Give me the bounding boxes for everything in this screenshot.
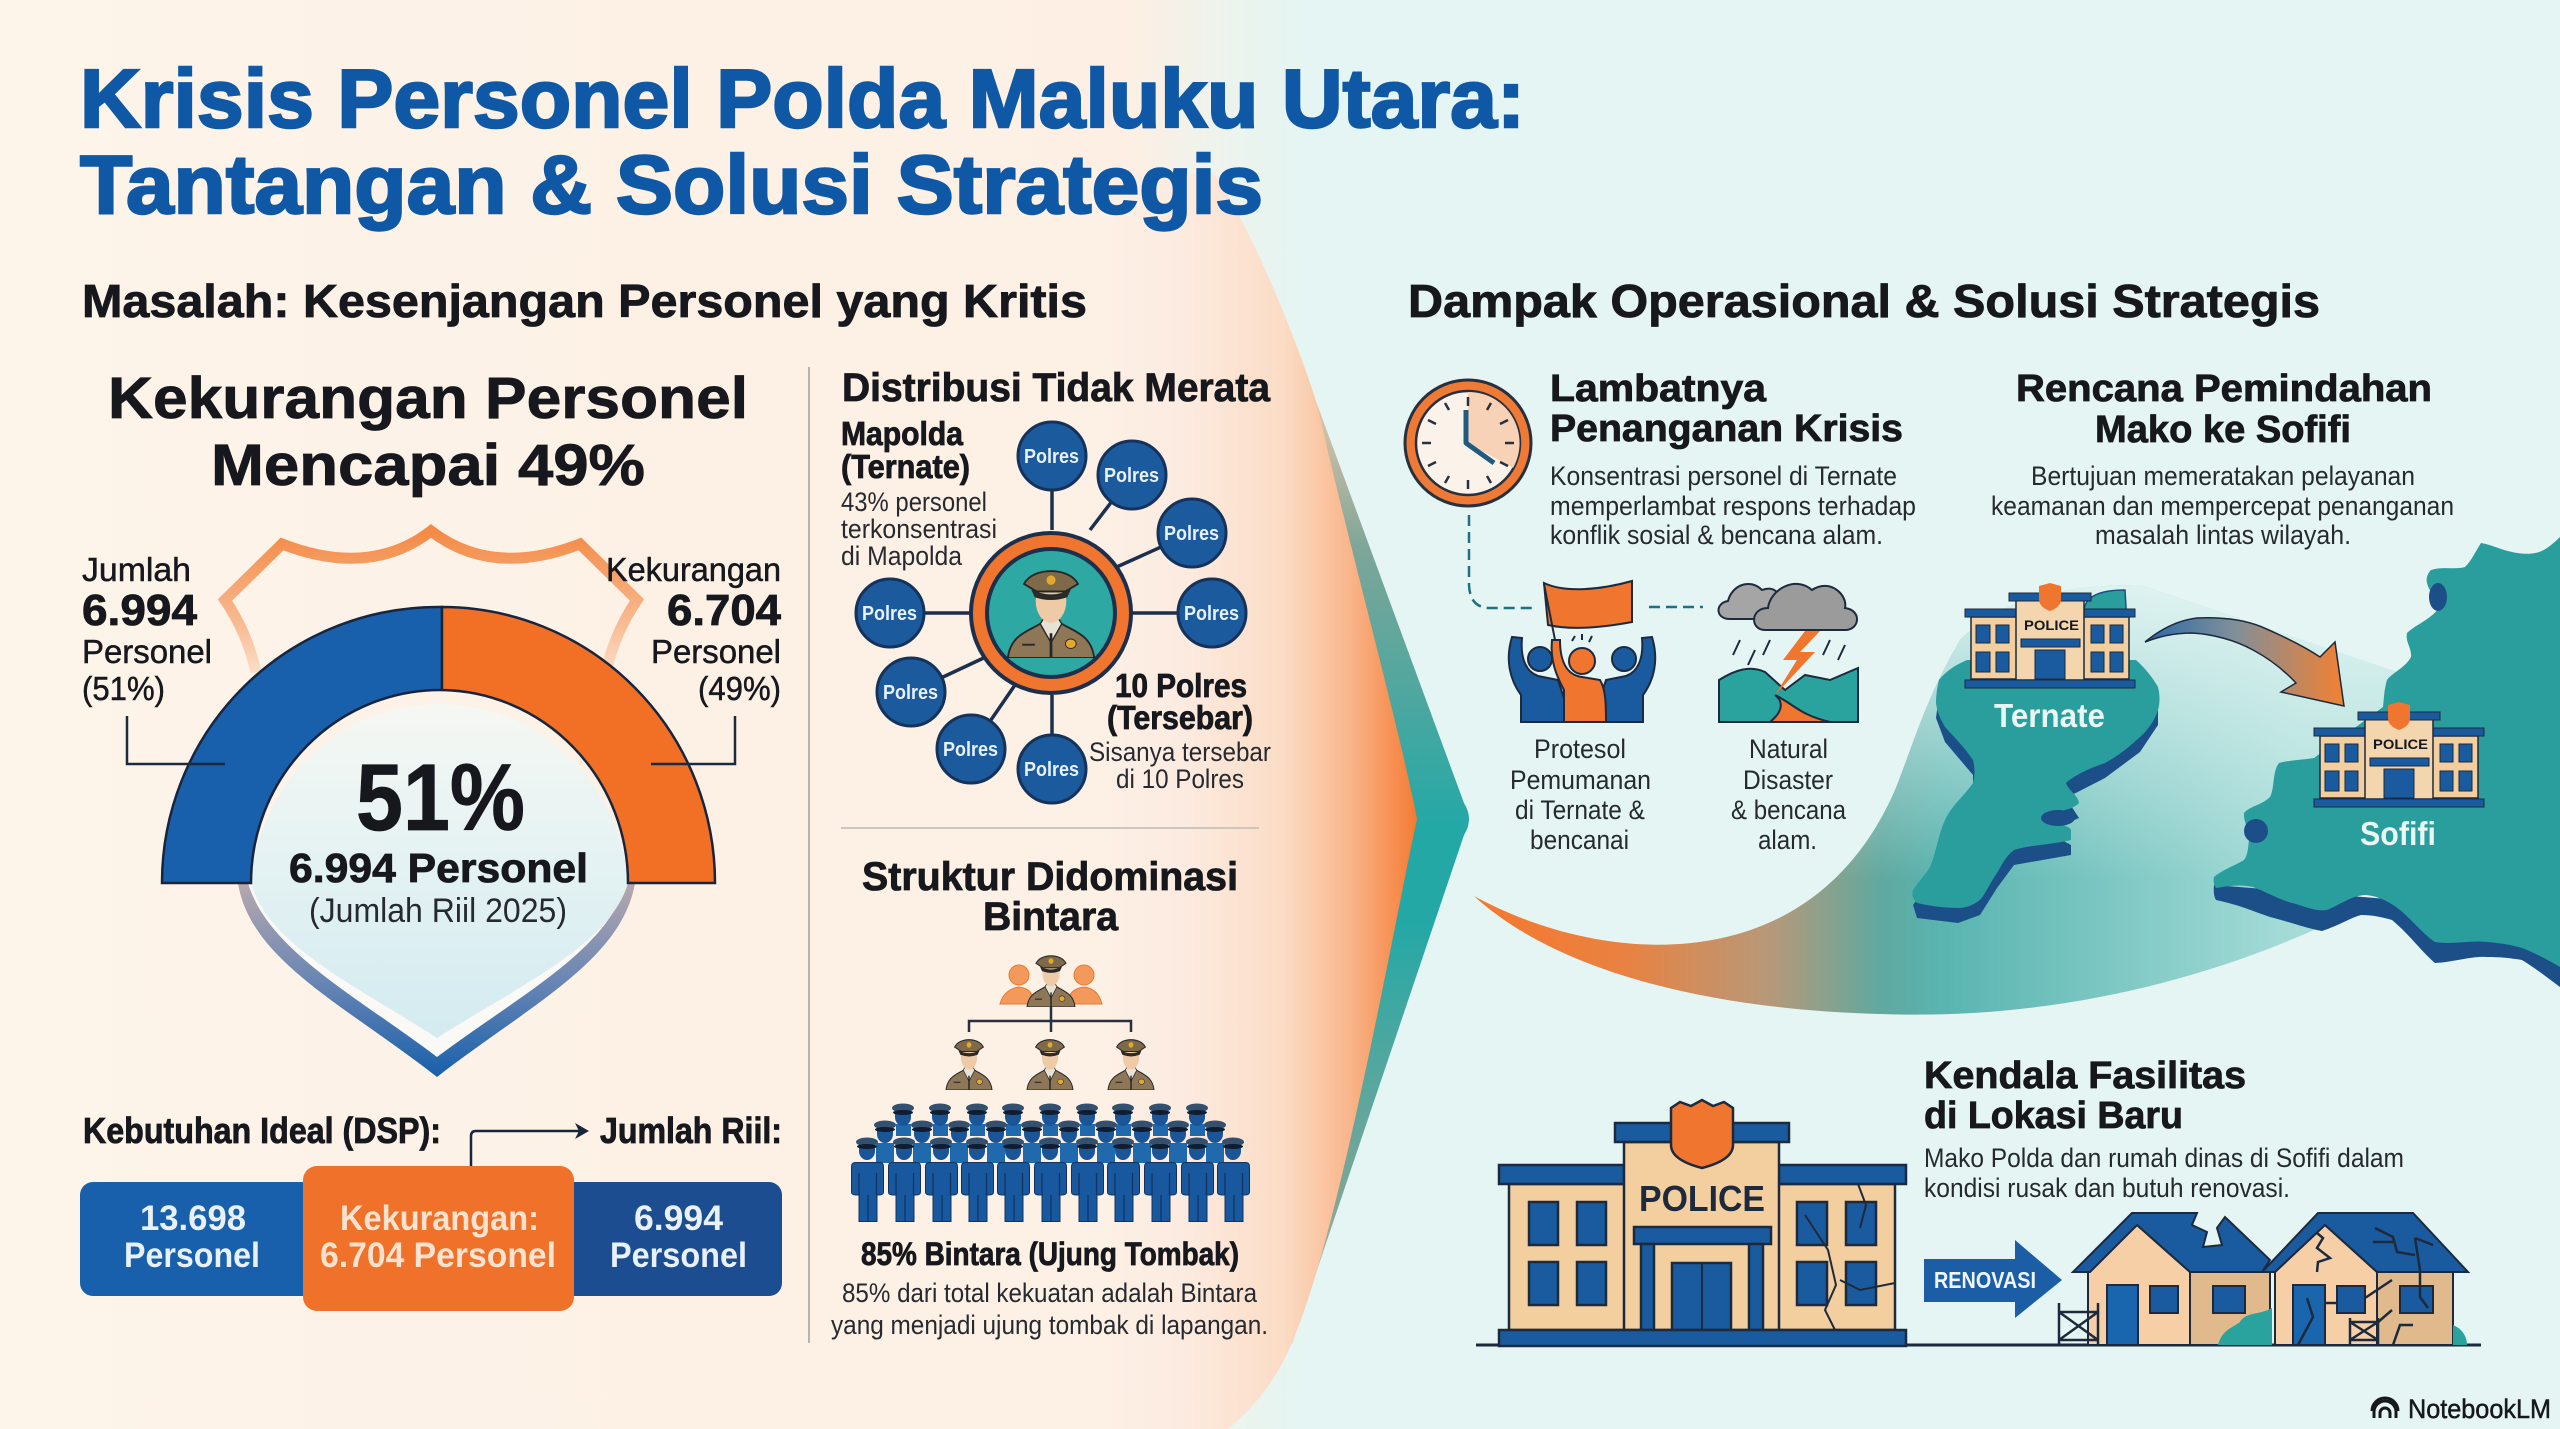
polres labels: Polres [1184, 603, 1239, 625]
text: rencana: Bertujuan memeratakan pelayanan [2031, 461, 2415, 491]
polres labels: Polres [1164, 523, 1219, 545]
label: sofifi: Sofifi [2360, 815, 2436, 852]
caption: protest: Protesol [1534, 734, 1626, 764]
text: mapolda: terkonsentrasi [841, 514, 997, 544]
text: 85% bintara: yang menjadi ujung tombak di lapangan. [831, 1310, 1268, 1340]
polres labels: Polres [1024, 446, 1079, 468]
icon: central officer [971, 533, 1131, 693]
label: jumlah: (51%) [82, 670, 165, 707]
right connector [651, 716, 735, 764]
gauge center value: 6.994 Personel [289, 845, 588, 891]
text: rencana: Mako ke Sofifi [2095, 409, 2351, 451]
text: kendala fasilitas: Kendala Fasilitas [1924, 1055, 2246, 1097]
icon: police headquarters [1499, 1100, 1906, 1346]
text: 10 polres: (Tersebar) [1107, 699, 1253, 736]
left connector [127, 716, 225, 764]
polres labels: Polres [943, 739, 998, 761]
gauge: blue 51% [162, 607, 442, 883]
title: Tantangan & Solusi Strategis [80, 138, 1263, 231]
polres labels: Polres [883, 682, 938, 704]
polres labels: Polres [862, 603, 917, 625]
icon: orange silhouettes [1000, 965, 1102, 1004]
heading: kekurangan personel [108, 366, 748, 498]
text: 10 polres [1089, 667, 1271, 794]
heading: kekurangan personel: Mencapai 49% [211, 433, 645, 498]
title: Krisis Personel Polda Maluku Utara: [80, 52, 1525, 145]
label: kekurangan: Personel [651, 633, 781, 670]
icon: sofifi police building: POLICE [2373, 736, 2428, 752]
panel: distribusi [841, 366, 1271, 803]
dashed connector [1469, 515, 1703, 608]
polres labels: Polres [1024, 759, 1079, 781]
bar: 13.698: 13.698 [140, 1199, 246, 1238]
text: lambatnya: Penanganan Krisis [1550, 408, 1903, 450]
caption: disaster: Natural [1749, 734, 1828, 764]
label: kebutuhan ideal: Kebutuhan Ideal (DSP): [83, 1110, 441, 1151]
text: mapolda: Mapolda [841, 415, 964, 452]
label: jumlah: 6.994 [82, 586, 198, 635]
text: kendala fasilitas: Mako Polda dan rumah dinas di Sofifi dalam [1924, 1143, 2404, 1173]
label: kekurangan: Kekurangan [606, 551, 781, 588]
text: lambatnya: Lambatnya [1550, 368, 1767, 410]
icon: clock [1405, 380, 1531, 506]
label: notebooklm: NotebookLM [2408, 1394, 2551, 1424]
heading: dampak: Dampak Operasional & Solusi Strategis [1408, 275, 2320, 327]
shield inner white [248, 883, 626, 1057]
icon: protest [1509, 581, 1655, 722]
bar: kekurangan [303, 1166, 574, 1311]
shield base [238, 883, 635, 1077]
icon: ternate police building [1965, 583, 2135, 688]
arrow: kekurangan to riil [471, 1123, 589, 1167]
text: lambatnya: konflik sosial & bencana alam. [1550, 520, 1883, 550]
text: 10 polres: 10 Polres [1115, 667, 1247, 704]
bar: 6.994 [560, 1182, 782, 1296]
icon: sofifi police building [2314, 702, 2484, 807]
label: jumlah [82, 551, 212, 707]
label: kekurangan: 6.704 [667, 586, 782, 635]
label: kekurangan: (49%) [698, 670, 781, 707]
text: kendala fasilitas [1924, 1055, 2404, 1203]
icon: three officers [946, 1040, 1154, 1090]
teal arrow wedge [1200, 404, 1469, 1344]
caption: protest: Pemumanan [1510, 765, 1651, 795]
icon: commander [1027, 956, 1075, 1007]
text: mapolda: di Mapolda [841, 541, 963, 571]
text: mapolda [841, 415, 997, 571]
text: lambatnya: memperlambat respons terhadap [1550, 491, 1916, 521]
text: 85% bintara [831, 1236, 1268, 1340]
gauge center value [289, 745, 588, 930]
caption: protest: di Ternate & [1515, 795, 1645, 825]
bar: kekurangan: Kekurangan: [340, 1199, 539, 1238]
text: rencana: Rencana Pemindahan [2016, 368, 2432, 410]
icon: ternate police building: POLICE [2024, 617, 2079, 633]
icon: polres nodes [856, 422, 1246, 803]
polres labels: Polres [1104, 465, 1159, 487]
shield inner pale [251, 704, 628, 1038]
icon: police headquarters: POLICE [1639, 1178, 1765, 1219]
label: ternate: Ternate [1994, 697, 2105, 734]
bar: 6.994: Personel [610, 1236, 747, 1275]
text: 10 polres: di 10 Polres [1116, 764, 1244, 794]
bar: 6.994: 6.994 [634, 1199, 724, 1238]
map: sofifi coast [2214, 537, 2560, 987]
icon: bintara crowd [852, 1104, 1250, 1222]
text: kendala fasilitas: di Lokasi Baru [1924, 1095, 2183, 1137]
text: mapolda: 43% personel [841, 487, 987, 517]
arrow: renovasi: RENOVASI [1934, 1267, 2036, 1293]
icon: shield outline [225, 531, 637, 672]
heading: masalah: Masalah: Kesenjangan Personel yang Kritis [82, 275, 1087, 327]
hierarchy lines [969, 1007, 1131, 1032]
orange arrow panel edge [1000, 160, 1417, 1429]
caption: disaster: & bencana [1731, 795, 1847, 825]
label: kekurangan [606, 551, 782, 707]
text: kendala fasilitas: kondisi rusak dan butuh renovasi. [1924, 1173, 2290, 1203]
caption: protest: bencanai [1530, 825, 1629, 855]
bar: 13.698 [80, 1182, 315, 1296]
label: jumlah: Personel [82, 633, 212, 670]
icon: damaged houses [2059, 1213, 2468, 1345]
arrow: renovasi [1924, 1240, 2062, 1318]
panel: kekurangan personel [80, 366, 782, 1311]
label: jumlah riil: Jumlah Riil: [600, 1110, 782, 1151]
text: rencana: keamanan dan mempercepat penanganan [1991, 491, 2454, 521]
gauge center value: 51% [356, 745, 525, 851]
bar: kekurangan: 6.704 Personel [320, 1236, 556, 1275]
caption: disaster: Disaster [1743, 765, 1833, 795]
text: mapolda: (Ternate) [841, 448, 970, 485]
heading: kekurangan personel: Kekurangan Personel [108, 366, 748, 431]
text: lambatnya [1550, 368, 1916, 550]
title [80, 52, 1525, 231]
heading: struktur [862, 855, 1238, 939]
heading: struktur: Bintara [983, 895, 1119, 939]
polres labels [862, 446, 1239, 781]
gauge center value: (Jumlah Riil 2025) [309, 892, 567, 930]
panel: struktur [831, 855, 1268, 1340]
caption: protest [1510, 734, 1651, 855]
label: jumlah: Jumlah [82, 551, 191, 588]
text: 85% bintara: 85% Bintara (Ujung Tombak) [861, 1236, 1239, 1272]
text: lambatnya: Konsentrasi personel di Ternate [1550, 461, 1897, 491]
text: rencana: masalah lintas wilayah. [2095, 520, 2351, 550]
hub spokes [890, 456, 1212, 769]
text: 85% bintara: 85% dari total kekuatan adalah Bintara [842, 1278, 1258, 1308]
caption: disaster: alam. [1758, 825, 1817, 855]
caption: disaster [1731, 734, 1847, 855]
icon: notebooklm logo [2372, 1398, 2398, 1418]
icon: storm [1718, 584, 1858, 722]
swoosh band [1474, 585, 2396, 1015]
text: 10 polres: Sisanya tersebar [1089, 737, 1271, 767]
heading: distribusi: Distribusi Tidak Merata [842, 366, 1271, 410]
bar: 13.698: Personel [124, 1236, 260, 1275]
map: ternate island [1912, 590, 2160, 923]
text: rencana [1991, 368, 2454, 550]
heading: struktur: Struktur Didominasi [862, 855, 1238, 899]
gauge: orange 49% [442, 607, 715, 883]
arrow: ternate to sofifi [2145, 618, 2344, 706]
